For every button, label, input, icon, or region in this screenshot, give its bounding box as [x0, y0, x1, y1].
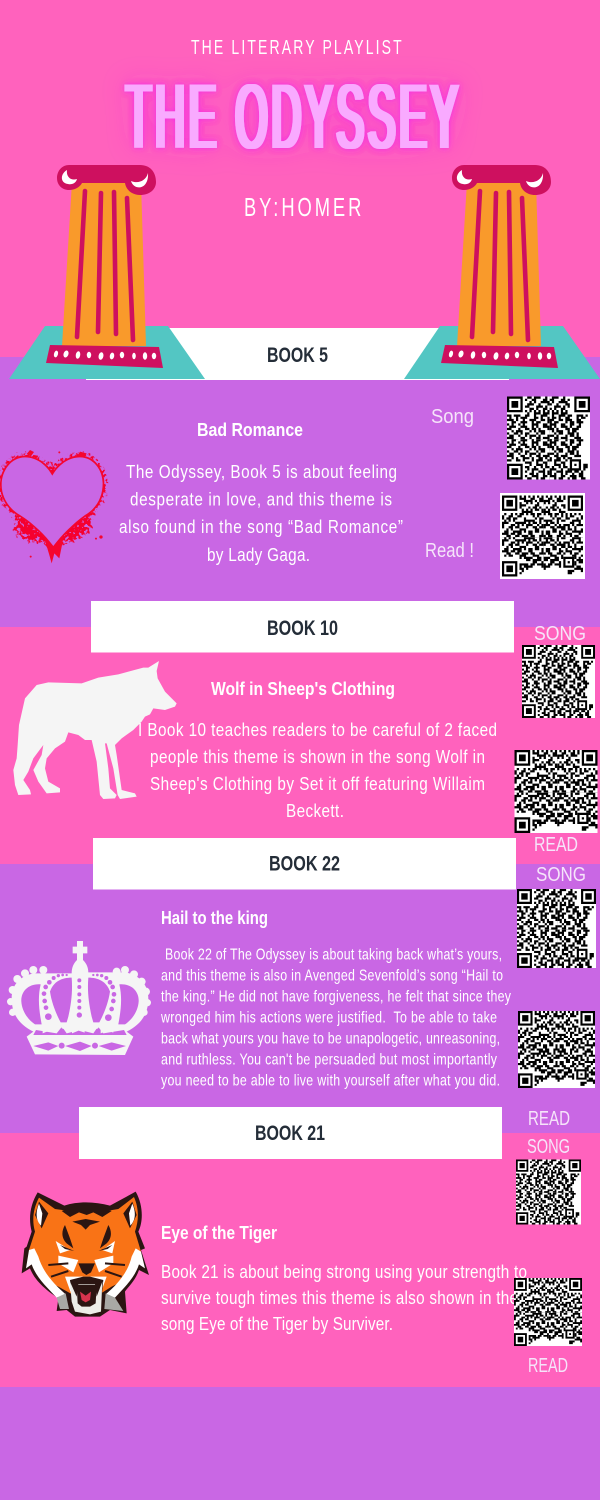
icon: right column: [404, 165, 600, 379]
body text: book 22: [160, 945, 511, 1089]
qr code: book 10 song: [522, 645, 595, 718]
panel: book 22: [7, 864, 596, 1130]
book 21 heading bar: BOOK 21: [255, 1121, 325, 1145]
icon: tiger head: [22, 1192, 149, 1317]
body text: book 22: Book 22 of The Odyssey is about taking back what’s yours,: [165, 945, 502, 963]
book 5 heading bar: BOOK 5: [267, 343, 328, 367]
body text: book 10: [138, 720, 497, 821]
body text: book 22: the king.” He did not have forgiveness, he felt that since they: [161, 987, 511, 1005]
book 21 heading bar: [79, 1107, 502, 1159]
song title: hail to the king: Hail to the king: [161, 907, 268, 928]
qr code: book 22 song: [517, 889, 596, 968]
body text: book 10: people this theme is shown in the song Wolf in: [150, 747, 485, 767]
panel: book 10: [13, 623, 597, 856]
body text: book 22: you need to be able to live with yourself after what you did.: [161, 1071, 500, 1089]
icon: crown: [7, 941, 151, 1055]
book 10 heading bar: [91, 601, 514, 652]
body text: book 22: and ruthless. You can't be persuaded but most importantly: [161, 1050, 497, 1068]
label: read: READ: [534, 834, 578, 856]
book 5 heading bar: [86, 328, 509, 380]
qr code: book 5 song: [507, 396, 590, 480]
body text: book 10: I Book 10 teaches readers to be careful of 2 faced: [138, 720, 497, 740]
book 22 heading bar: [93, 838, 516, 890]
kicker: the literary playlist: THE LITERARY PLAYLIST: [191, 35, 402, 59]
book 10 heading bar: BOOK 10: [267, 616, 338, 640]
qr code: book 22 read: [518, 1011, 595, 1088]
book 22 heading bar: BOOK 22: [269, 852, 340, 876]
icon: wolf silhouette: [13, 661, 177, 799]
body text: book 22: back what yours you have to be unapologetic, unreasoning,: [161, 1029, 500, 1047]
title: the odyssey: THE ODYSSEY: [126, 67, 458, 169]
body text: book 21: Book 21 is about being strong using your strength to: [161, 1262, 527, 1282]
song title: wolf in sheep's clothing: Wolf in Sheep's Clothing: [211, 678, 395, 699]
song title: bad romance: Bad Romance: [197, 419, 303, 440]
qr code: book 5 read: [500, 493, 585, 579]
qr code: book 10 read: [514, 750, 598, 833]
body text: book 21: song Eye of the Tiger by Surviver.: [161, 1314, 393, 1334]
body text: book 5: The Odyssey, Book 5 is about feeling: [126, 462, 397, 482]
body text: book 21: survive tough times this theme is also shown in the: [161, 1288, 518, 1308]
body text: book 22: wronged him his actions were justified. To be able to take: [160, 1008, 497, 1026]
body text: book 10: Sheep's Clothing by Set it off featuring Willaim: [150, 774, 485, 794]
panel: book 5: [2, 396, 590, 579]
header: [126, 35, 458, 222]
body text: book 5: by Lady Gaga.: [207, 545, 310, 565]
icon: splattered heart: [2, 450, 103, 563]
label: read: Read !: [425, 540, 474, 562]
body text: book 5: desperate in love, and this theme is: [130, 489, 392, 510]
body text: book 5: also found in the song “Bad Romance”: [119, 517, 403, 537]
author: by homer: BY:HOMER: [244, 193, 361, 222]
body text: book 21: [161, 1262, 527, 1334]
body text: book 22: and this theme is also in Avenged Sevenfold’s song “Hail to: [161, 966, 503, 984]
label: song: SONG: [536, 864, 586, 886]
body text: book 10: Beckett.: [286, 801, 344, 821]
song title: eye of the tiger: Eye of the Tiger: [161, 1222, 277, 1243]
qr code: book 21 read: [514, 1278, 582, 1346]
label: song: Song: [431, 406, 474, 428]
body text: book 5: [119, 462, 403, 565]
qr code: book 21 song: [516, 1160, 581, 1224]
label: song: SONG: [527, 1136, 570, 1158]
icon: left column: [9, 165, 205, 379]
label: read: READ: [528, 1355, 568, 1377]
label: song: SONG: [534, 623, 586, 645]
panel: book 21: [22, 1136, 582, 1377]
label: read: READ: [528, 1108, 570, 1130]
